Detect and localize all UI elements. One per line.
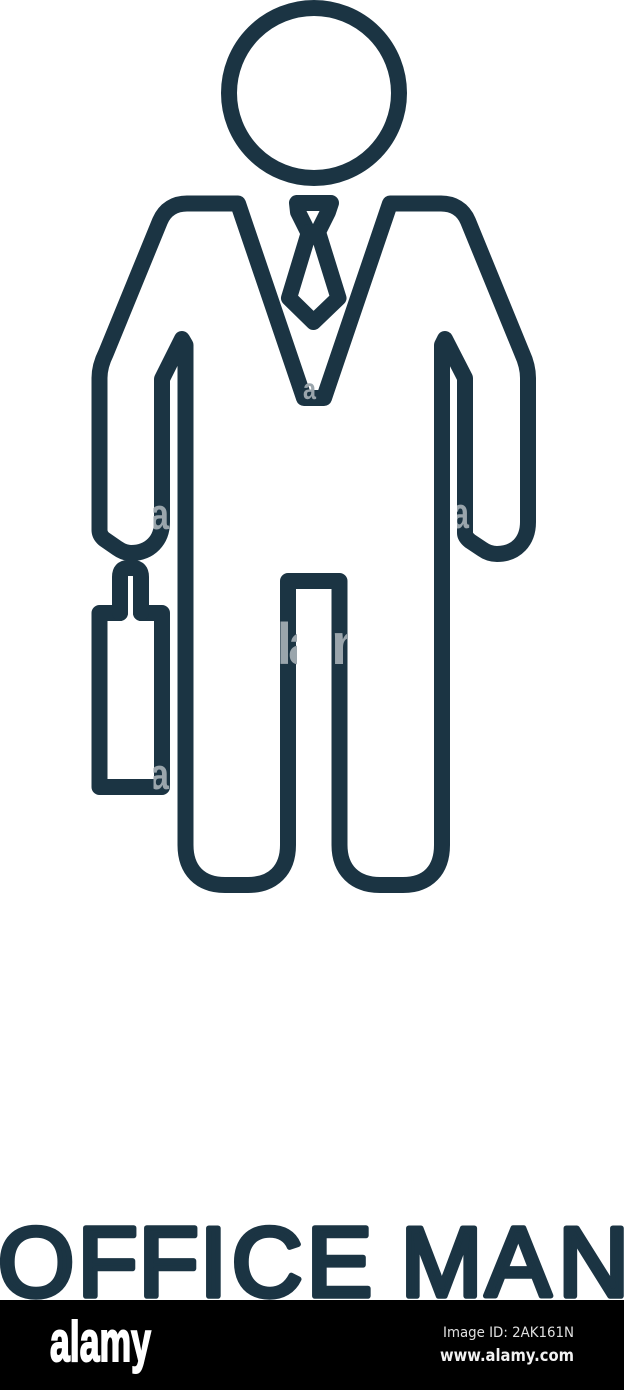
alamy logo: alamy bbox=[50, 1310, 151, 1374]
watermark fragments: a bbox=[452, 489, 469, 538]
watermark fragments bbox=[154, 383, 470, 790]
footer bar bbox=[0, 1300, 624, 1390]
tie bbox=[289, 203, 338, 322]
briefcase bbox=[100, 568, 162, 787]
watermark fragments: lamy bbox=[276, 612, 624, 677]
head bbox=[229, 8, 399, 178]
icon: office man bbox=[100, 8, 528, 885]
briefcase handle bbox=[120, 568, 141, 613]
watermark fragments: a bbox=[150, 490, 169, 539]
watermark fragments: a bbox=[303, 373, 316, 406]
briefcase body bbox=[100, 613, 162, 787]
title: OFFICE MAN bbox=[0, 1207, 624, 1317]
image id: Image ID: 2AK161N bbox=[443, 1325, 574, 1341]
website: www.alamy.com bbox=[440, 1346, 574, 1366]
tie knot bbox=[297, 203, 331, 236]
watermark fragments: a bbox=[150, 750, 169, 799]
tie blade bbox=[289, 232, 338, 322]
suit body and arms bbox=[100, 204, 528, 885]
